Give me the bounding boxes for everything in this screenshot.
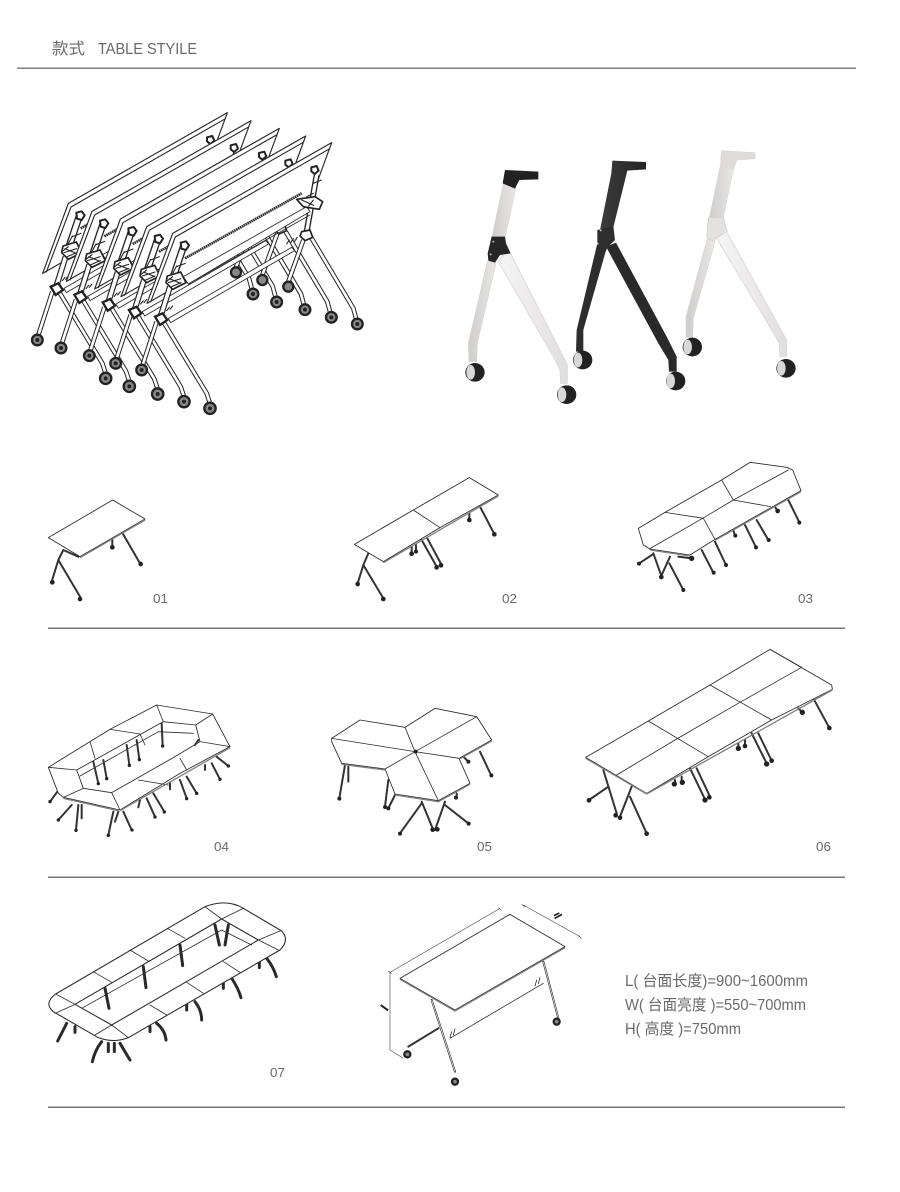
specifications text: H( 高度 )=750mm <box>625 1020 741 1038</box>
table leg photos <box>465 151 796 404</box>
label 07: 07 <box>270 1065 285 1080</box>
table style 01 <box>48 500 145 601</box>
label 02: 02 <box>502 591 517 606</box>
dimension table drawing <box>381 904 582 1085</box>
divider <box>48 628 845 629</box>
table style 07 <box>49 903 285 1062</box>
label 03: 03 <box>798 591 813 606</box>
table style 06 <box>586 649 832 836</box>
table style 05 <box>332 708 493 836</box>
table style 04 <box>48 705 230 837</box>
specifications text: W( 台面亮度 )=550~700mm <box>625 996 806 1014</box>
title: 款式 <box>52 40 85 58</box>
leg: white with black joint <box>465 170 576 404</box>
title <box>52 40 197 58</box>
leg: black <box>573 161 685 390</box>
specifications text: L( 台面长度)=900~1600mm <box>625 972 808 990</box>
title: TABLE STYILE <box>98 41 197 58</box>
specifications text <box>625 972 808 1038</box>
leg: light grey <box>683 151 796 378</box>
label 06: 06 <box>816 839 831 854</box>
label 04: 04 <box>214 839 229 854</box>
folded tables line drawing <box>32 113 363 414</box>
divider <box>48 877 845 878</box>
divider <box>48 1107 845 1108</box>
label 01: 01 <box>153 591 168 606</box>
table style 02 <box>354 478 498 601</box>
table style 03 <box>637 462 801 592</box>
label 05: 05 <box>477 839 492 854</box>
dimension lines <box>381 904 582 1058</box>
